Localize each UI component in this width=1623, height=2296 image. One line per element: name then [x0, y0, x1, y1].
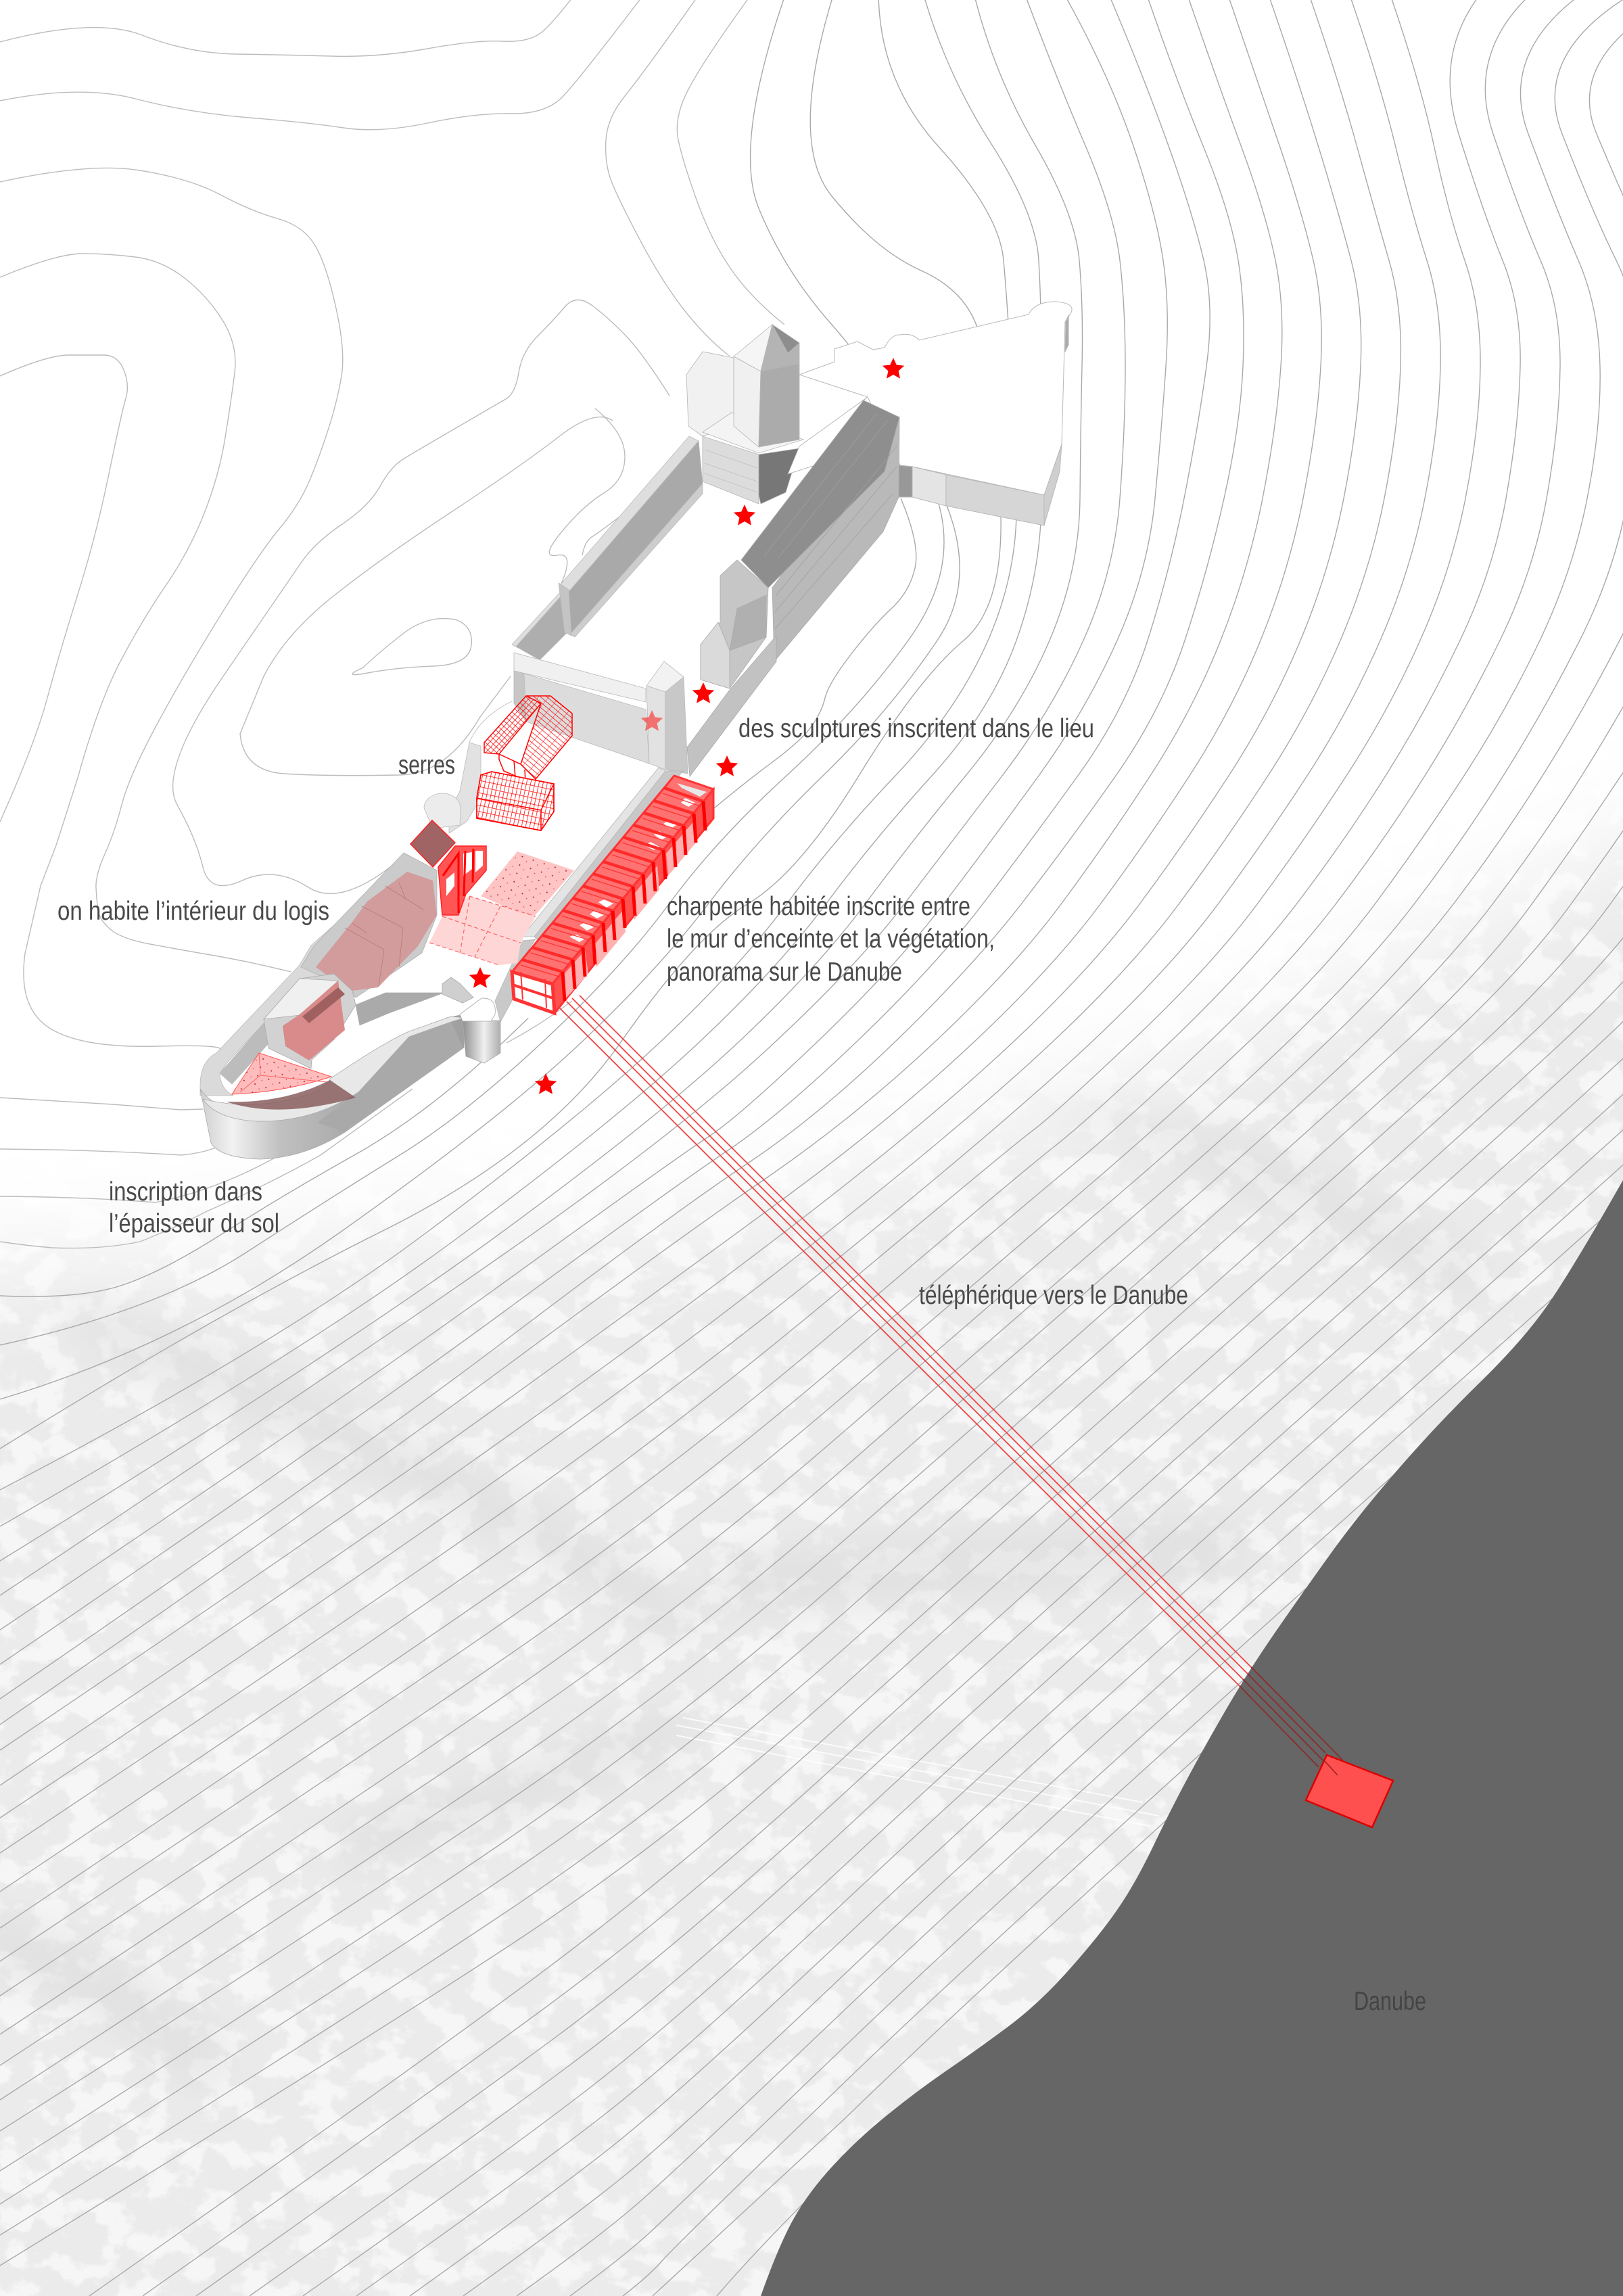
castle footprint [200, 325, 899, 1159]
south-east rampart [495, 768, 683, 1022]
river: Danube [761, 1180, 1623, 2296]
transverse wall with small tower [514, 653, 688, 774]
logis block translucent [301, 853, 437, 998]
cross beams [522, 788, 703, 972]
star, seen through the tower [641, 710, 663, 731]
label: charpente [667, 892, 995, 987]
north wall [512, 436, 703, 660]
inner courtyard arm and gatehouse [356, 977, 473, 1025]
label: inscription: inscription dans [109, 1177, 262, 1206]
star [535, 1073, 557, 1094]
label: logis: on habite l’intérieur du logis [57, 897, 329, 926]
téléphérique cables [558, 995, 1342, 1775]
pink floor plane [429, 851, 574, 965]
inscription dans l'épaisseur du sol: red floor [226, 1053, 356, 1110]
north turret and wall [424, 701, 512, 833]
west courtyard wall [200, 856, 437, 1096]
truss side face [552, 789, 713, 1013]
second logis volume [264, 974, 356, 1069]
truss top face [512, 776, 713, 984]
label: serres: serres [398, 751, 455, 780]
round gate tower [460, 998, 500, 1063]
label: charpente: panorama sur le Danube [667, 958, 902, 987]
long logis building [687, 397, 899, 776]
label: sculptures: des sculptures inscritent dans le lieu [738, 714, 1094, 743]
star [883, 358, 904, 379]
label: téléphérique: téléphérique vers le Danube [919, 1281, 1188, 1310]
terrace and ramparts [799, 302, 1072, 525]
label: inscription: l’épaisseur du sol [109, 1209, 279, 1238]
label: inscription [109, 1177, 279, 1238]
south wall [200, 1014, 464, 1159]
sculpture markers: red stars [469, 358, 904, 1094]
red frame in logis with dark roof [410, 820, 486, 915]
label: Danube: Danube [1354, 1987, 1426, 2016]
label: charpente: le mur d’enceinte et la végétation, [667, 924, 995, 954]
serres: greenhouse wireframes [477, 696, 572, 830]
label: charpente: charpente habitée inscrite entre [667, 892, 970, 921]
keep with tower [686, 325, 803, 504]
labels [57, 714, 1426, 2016]
star [716, 755, 738, 776]
téléphérique station on the Danube [1306, 1755, 1393, 1827]
castle [200, 302, 1072, 1159]
truss end face [512, 972, 555, 1013]
star [469, 967, 491, 988]
openings [569, 783, 707, 942]
charpente habitée: red truss [512, 776, 713, 1013]
star [692, 682, 714, 703]
star [734, 505, 755, 525]
